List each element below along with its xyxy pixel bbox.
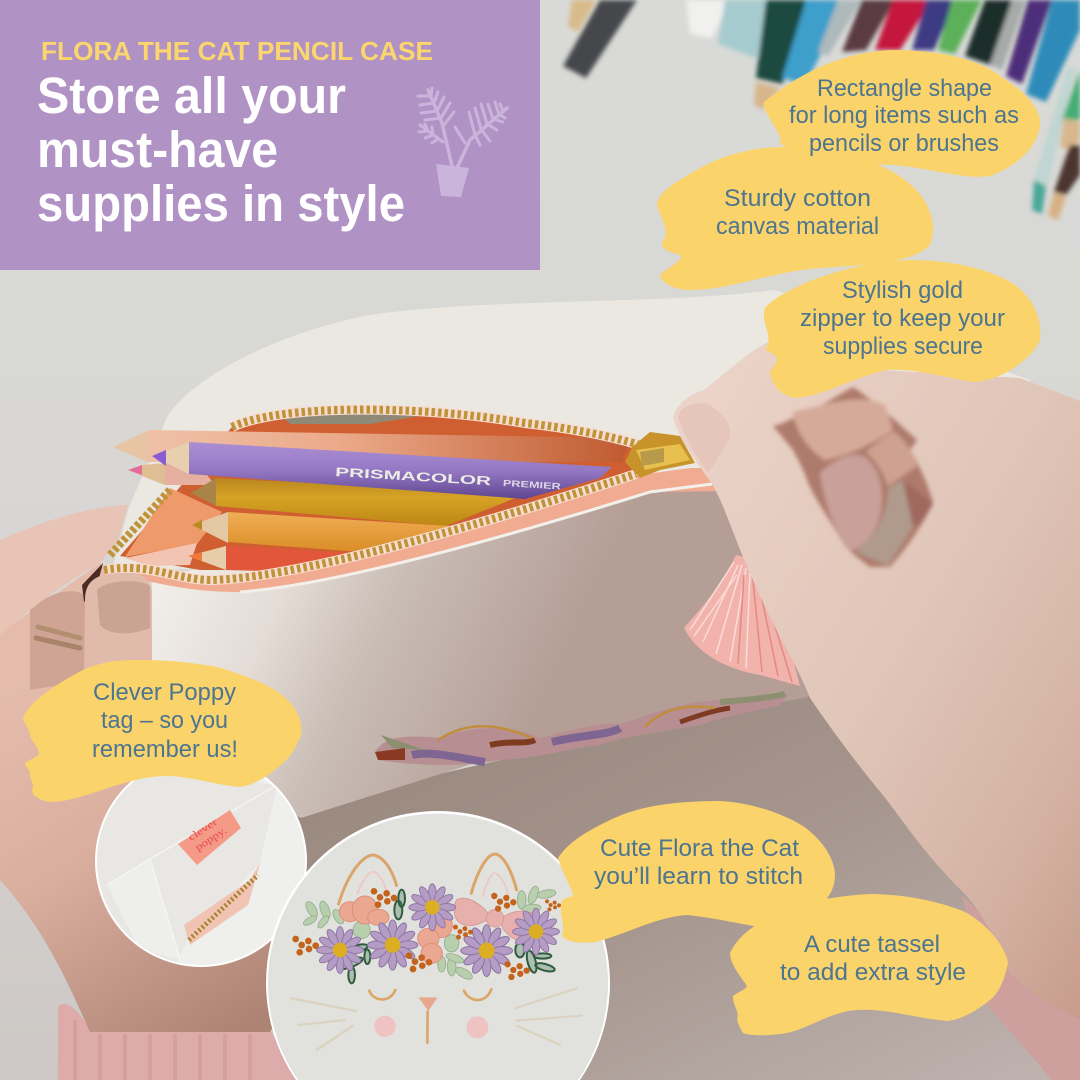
cat face <box>291 988 582 1050</box>
zipper slider <box>625 432 695 478</box>
ring <box>36 627 80 648</box>
callout: cotton canvas: Sturdy cotton <box>724 185 871 212</box>
tag <box>178 810 241 865</box>
callout: gold zipper <box>764 260 1040 398</box>
inset photo: Clever Poppy tag <box>95 776 307 967</box>
embroidery seen on case front <box>375 694 788 765</box>
callout: rectangle shape <box>763 50 1040 177</box>
product name: FLORA THE CAT PENCIL CASE <box>41 36 433 66</box>
callout: Clever Poppy tag: tag – so you <box>101 707 228 734</box>
zipper lower <box>104 474 636 580</box>
case interior <box>120 408 640 570</box>
fingers behind <box>30 591 90 690</box>
callout: rectangle shape: for long items such as <box>789 102 1019 129</box>
zipper tape lower <box>102 468 820 592</box>
thumb nail <box>678 403 730 472</box>
tassel <box>684 555 800 686</box>
headline: must-have <box>37 121 278 178</box>
middle fingertip <box>820 455 882 550</box>
pencil brand text <box>335 465 562 492</box>
dark nail <box>82 563 103 602</box>
blurred coloured pencils <box>563 0 1080 220</box>
left thumb <box>84 573 152 670</box>
leaves <box>302 885 557 982</box>
peach pencil <box>113 430 630 463</box>
shadowed finger <box>903 480 933 527</box>
left hand <box>0 505 300 1032</box>
ears <box>339 854 517 904</box>
canvas seen between fingers <box>856 480 913 566</box>
pencils <box>113 430 630 572</box>
red pencil <box>188 546 352 572</box>
callout: Clever Poppy tag: remember us! <box>92 736 238 763</box>
callout: cotton canvas: canvas material <box>716 213 879 240</box>
pencil brand text: PRISMACOLOR <box>335 465 491 488</box>
purple pencil <box>152 442 612 499</box>
pink pencil <box>128 463 215 485</box>
icon: potted plant <box>418 88 507 197</box>
callout: tassel <box>730 894 1008 1035</box>
headline: Store all your <box>37 67 346 124</box>
right hand <box>673 338 1080 1020</box>
pencil brand text: PREMIER <box>503 478 562 491</box>
callout: Clever Poppy tag: Clever Poppy <box>93 679 236 706</box>
callout: gold zipper: supplies secure <box>823 333 983 360</box>
bow <box>454 898 535 942</box>
purple flowers <box>317 927 363 973</box>
headline <box>37 67 405 232</box>
callout: Clever Poppy tag <box>23 660 301 802</box>
left sleeve <box>58 1004 300 1080</box>
fingers seen through the grip <box>773 387 933 567</box>
callout: gold zipper: zipper to keep your <box>800 305 1005 332</box>
index finger <box>0 505 128 635</box>
curled middle knuckle <box>866 432 917 486</box>
inset photo: Clever Poppy tag: clever <box>187 817 220 844</box>
yellow pencil <box>191 478 525 526</box>
callout: cotton canvas <box>657 147 933 290</box>
callout: tassel: A cute tassel <box>804 931 940 958</box>
berries <box>292 936 319 956</box>
zipper upper <box>232 410 640 445</box>
fan flowers <box>339 896 452 963</box>
inset photo: Clever Poppy tag: poppy. <box>194 825 229 854</box>
headline: supplies in style <box>37 175 405 232</box>
callout: Flora the Cat: Cute Flora the Cat <box>600 835 799 862</box>
callout: gold zipper: Stylish gold <box>842 277 963 304</box>
callout: rectangle shape: Rectangle shape <box>817 75 992 102</box>
inset photo: cat embroidery <box>260 810 620 1080</box>
callout: Flora the Cat: you’ll learn to stitch <box>594 863 803 890</box>
right sleeve <box>962 895 1080 1080</box>
curled index knuckle <box>793 399 893 460</box>
pencil case front panel <box>152 470 905 818</box>
orange pencil <box>192 512 450 553</box>
header panel <box>0 0 540 270</box>
callout: Flora the Cat <box>558 801 852 943</box>
zipper on inset <box>184 863 260 945</box>
callout: rectangle shape: pencils or brushes <box>809 130 999 157</box>
gap between fingers <box>773 387 933 567</box>
callout: tassel: to add extra style <box>780 959 966 986</box>
pencil case back panel <box>112 290 1030 570</box>
